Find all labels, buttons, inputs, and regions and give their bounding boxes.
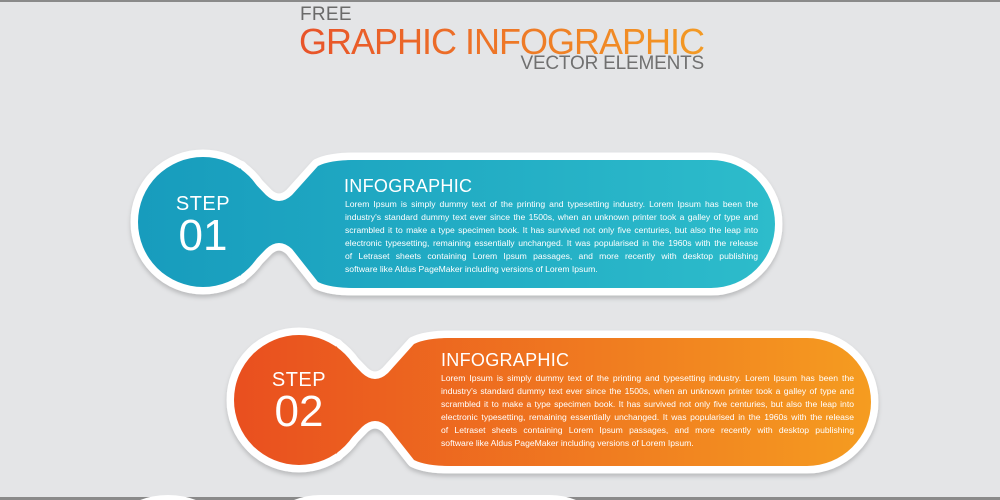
step 2 body text: electronic typesetting, remaining essentially unchanged. It was popularised in the 1960s with the release — [441, 412, 854, 422]
step 2 body text: Lorem Ipsum is simply dummy text of the printing and typesetting industry. Lorem Ipsum has been the — [441, 373, 854, 383]
step 1 body text: software like Aldus PageMaker including versions of Lorem Ipsum. — [345, 264, 598, 274]
step 2 label: 02 — [275, 387, 323, 436]
step 1 body text: of Letraset sheets containing Lorem Ipsum passages, and more recently with desktop publishing — [345, 251, 758, 261]
frame lines — [0, 0, 1000, 2]
step 2 shape — [234, 335, 871, 466]
step 1 body text — [345, 199, 758, 274]
step 2 body text: scrambled it to make a type specimen book. It has survived not only five centuries, but also the leap into — [441, 399, 854, 409]
step 1 label: 01 — [179, 211, 227, 260]
step 1 label — [176, 193, 230, 260]
step 2 heading: INFOGRAPHIC — [441, 350, 569, 370]
step 1 label: STEP — [176, 193, 230, 215]
title: VECTOR ELEMENTS — [520, 53, 704, 74]
step 1 body text: electronic typesetting, remaining essentially unchanged. It was popularised in the 1960s with the release — [345, 238, 758, 248]
title — [299, 4, 704, 74]
step 2 body text: of Letraset sheets containing Lorem Ipsum passages, and more recently with desktop publishing — [441, 425, 854, 435]
step 1 body text: industry's standard dummy text ever since the 1500s, when an unknown printer took a galley of type and — [345, 212, 758, 222]
title: FREE — [300, 4, 352, 25]
title: GRAPHIC INFOGRAPHIC — [299, 21, 704, 62]
step 2 body text: industry's standard dummy text ever since the 1500s, when an unknown printer took a galley of type and — [441, 386, 854, 396]
step 2 body text — [441, 373, 854, 448]
step 2 body text: software like Aldus PageMaker including versions of Lorem Ipsum. — [441, 438, 694, 448]
step 2 label — [272, 369, 326, 436]
step 1 shape — [138, 157, 775, 288]
step 3 shape (partial) — [88, 495, 620, 500]
step 1 heading: INFOGRAPHIC — [344, 176, 472, 196]
step 1 body text: scrambled it to make a type specimen book. It has survived not only five centuries, but also the leap into — [345, 225, 758, 235]
step 2 label: STEP — [272, 369, 326, 391]
step 1 body text: Lorem Ipsum is simply dummy text of the printing and typesetting industry. Lorem Ipsum has been the — [345, 199, 758, 209]
